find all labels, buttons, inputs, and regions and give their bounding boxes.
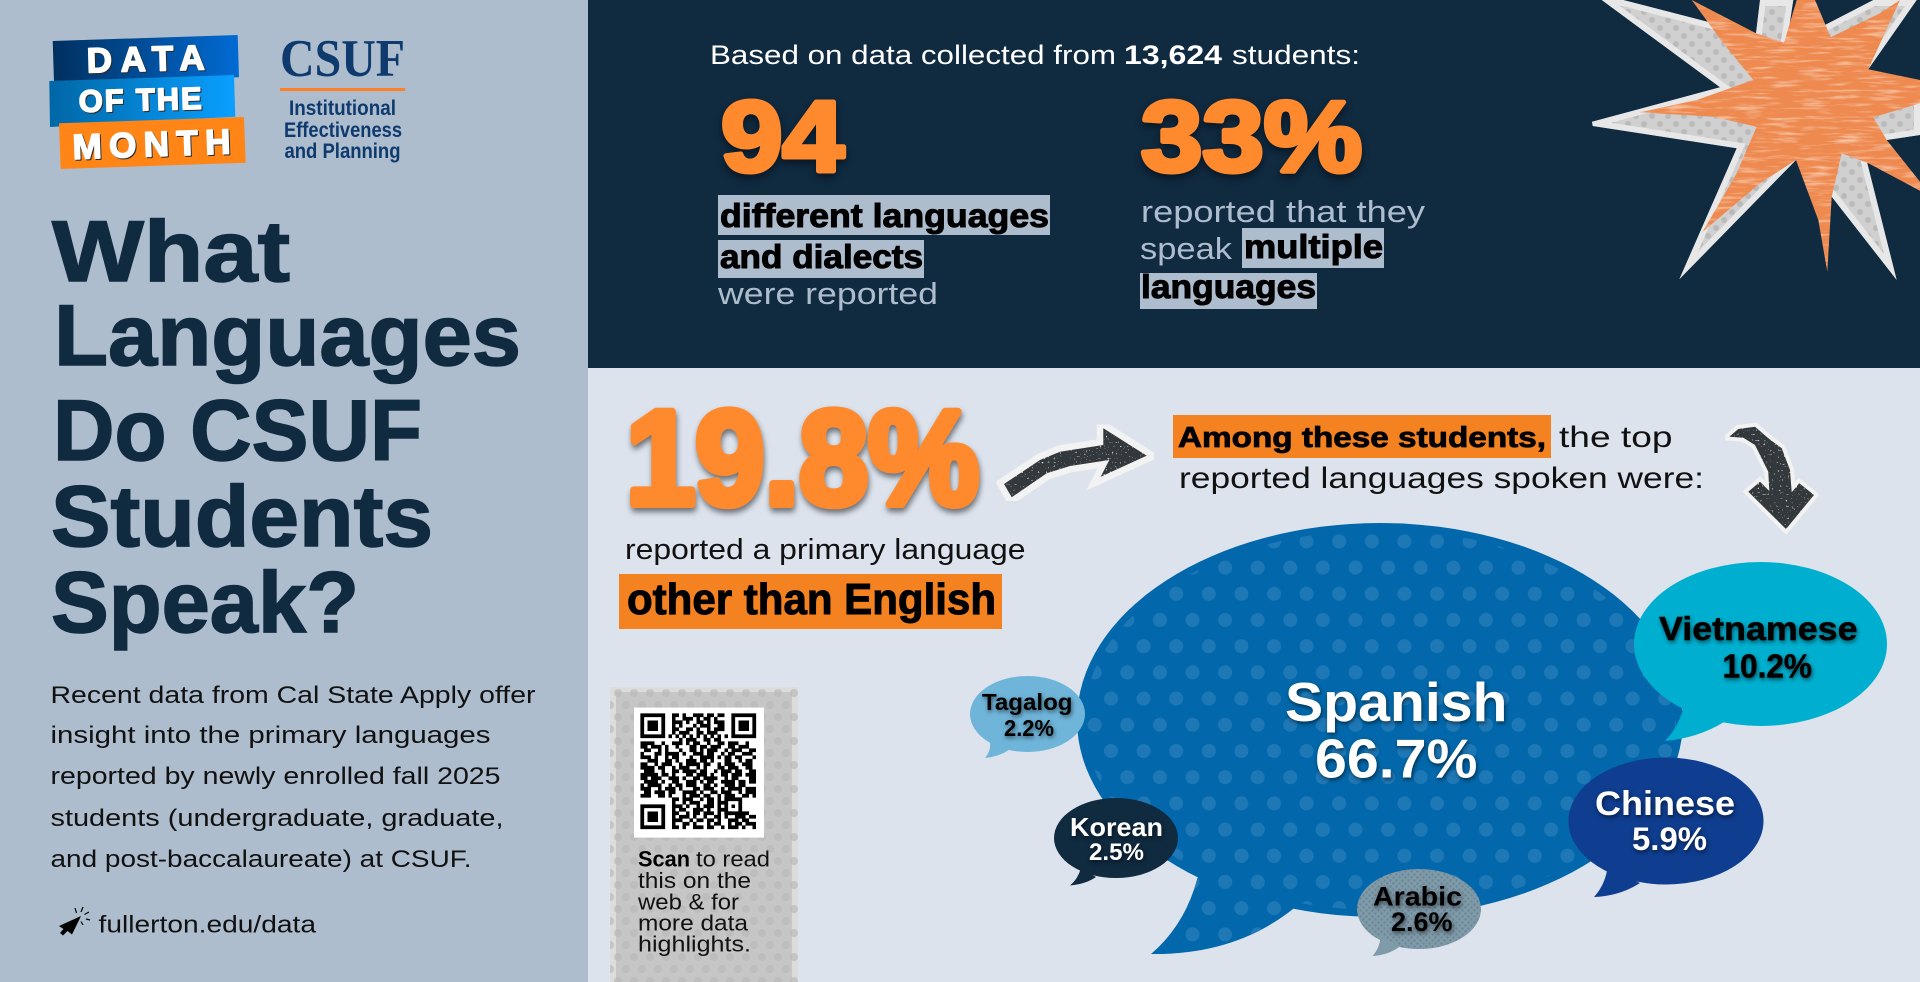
panel: top stats — [588, 0, 1920, 368]
scan caption: highlights. — [638, 932, 751, 957]
scan caption: Scan — [638, 846, 690, 872]
speech bubble: Vietnamese: 10.2% — [1722, 648, 1812, 685]
title: Speak? — [51, 555, 359, 651]
speech bubble: Chinese — [1568, 758, 1764, 897]
speech bubble: Vietnamese: Vietnamese — [1659, 610, 1858, 647]
badge: data of the month — [49, 35, 246, 169]
link text: fullerton.edu/data — [98, 912, 316, 938]
stat: 94 languages: different languages — [720, 197, 1049, 234]
stat: 33 percent: 33% — [1141, 81, 1362, 193]
speech bubble: Spanish — [1077, 523, 1683, 954]
title: Students — [51, 469, 433, 565]
arrow: down — [1729, 427, 1814, 529]
scan caption: more data — [638, 910, 749, 936]
text: among these students: reported languages spoken were: — [1179, 462, 1704, 495]
speech bubble: Korean: Korean — [1070, 812, 1163, 842]
description text: Recent data from Cal State Apply offer — [50, 682, 536, 709]
logo: CSUF Institutional Effectiveness and Planning — [280, 30, 405, 163]
speech bubble: Arabic: Arabic — [1373, 882, 1462, 912]
starburst decoration — [1592, 0, 1920, 280]
stat: 33 percent: speak — [1140, 231, 1233, 266]
speech bubble: Arabic — [1357, 869, 1481, 956]
scan caption — [637, 846, 770, 957]
logo: CSUF Institutional Effectiveness and Planning: Effectiveness — [284, 119, 402, 142]
intro sentence: 13,624 — [1124, 40, 1222, 70]
speech bubble: Arabic: 2.6% — [1391, 907, 1452, 937]
stat: 94 languages: 94 — [721, 81, 844, 193]
stat: 33 percent — [1140, 81, 1426, 309]
panel: sidebar — [0, 0, 588, 982]
title: Languages — [54, 288, 521, 384]
title — [51, 204, 521, 651]
QR code — [634, 708, 764, 838]
speech bubble: Korean: 2.5% — [1089, 839, 1144, 866]
intro sentence — [710, 40, 1360, 70]
description text: students (undergraduate, graduate, — [50, 805, 504, 832]
speech bubble: Chinese: 5.9% — [1632, 821, 1707, 857]
scan caption: this on the — [638, 868, 751, 893]
logo: CSUF Institutional Effectiveness and Planning: Institutional — [289, 97, 396, 120]
stat: 19.8 percent: other than English — [627, 575, 996, 624]
stat: 33 percent: reported that they — [1141, 194, 1426, 229]
description text: insight into the primary languages — [50, 722, 490, 749]
logo: CSUF Institutional Effectiveness and Planning: and Planning — [284, 140, 400, 163]
speech bubble: Spanish: Spanish — [1285, 671, 1508, 733]
scan caption: to read — [696, 846, 770, 872]
badge: data of the month: MONTH — [72, 123, 231, 167]
text: among these students: Among these students, — [1178, 422, 1546, 454]
stat: 33 percent: multiple — [1244, 228, 1383, 265]
title: Do CSUF — [53, 383, 422, 479]
stat: 94 languages: were reported — [717, 276, 938, 311]
speech bubble: Tagalog — [970, 676, 1085, 758]
stat: 33 percent: languages — [1141, 268, 1316, 305]
arrow: right — [1004, 428, 1147, 497]
icon: cursor click — [59, 907, 90, 936]
text: among these students: the top — [1559, 421, 1672, 454]
panel: QR card — [610, 687, 798, 982]
speech bubble: Tagalog: Tagalog — [982, 689, 1072, 715]
speech bubble: Tagalog: 2.2% — [1004, 715, 1054, 741]
intro sentence: Based on data collected from — [710, 40, 1116, 70]
stat: 94 languages: and dialects — [720, 238, 923, 275]
badge: data of the month: DATA — [86, 38, 205, 80]
speech bubble: Korean — [1054, 798, 1178, 886]
description text: and post-baccalaureate) at CSUF. — [50, 846, 472, 873]
intro sentence: students: — [1232, 40, 1360, 70]
stat: 19.8 percent — [619, 384, 1026, 629]
stat: 19.8 percent: reported a primary language — [625, 534, 1026, 566]
title: What — [52, 204, 290, 300]
speech bubble: Vietnamese — [1634, 562, 1887, 741]
description text — [50, 682, 536, 873]
logo: CSUF Institutional Effectiveness and Planning: CSUF — [280, 30, 405, 88]
stat: 94 languages — [717, 81, 1050, 311]
description text: reported by newly enrolled fall 2025 — [50, 763, 500, 790]
speech bubble: Chinese: Chinese — [1595, 785, 1735, 823]
stat: 19.8 percent: 19.8% — [626, 384, 979, 533]
speech bubble: Spanish: 66.7% — [1315, 728, 1478, 790]
badge: data of the month: OF THE — [78, 81, 202, 119]
text: among these students — [1173, 415, 1704, 495]
scan caption: web & for — [637, 889, 739, 914]
